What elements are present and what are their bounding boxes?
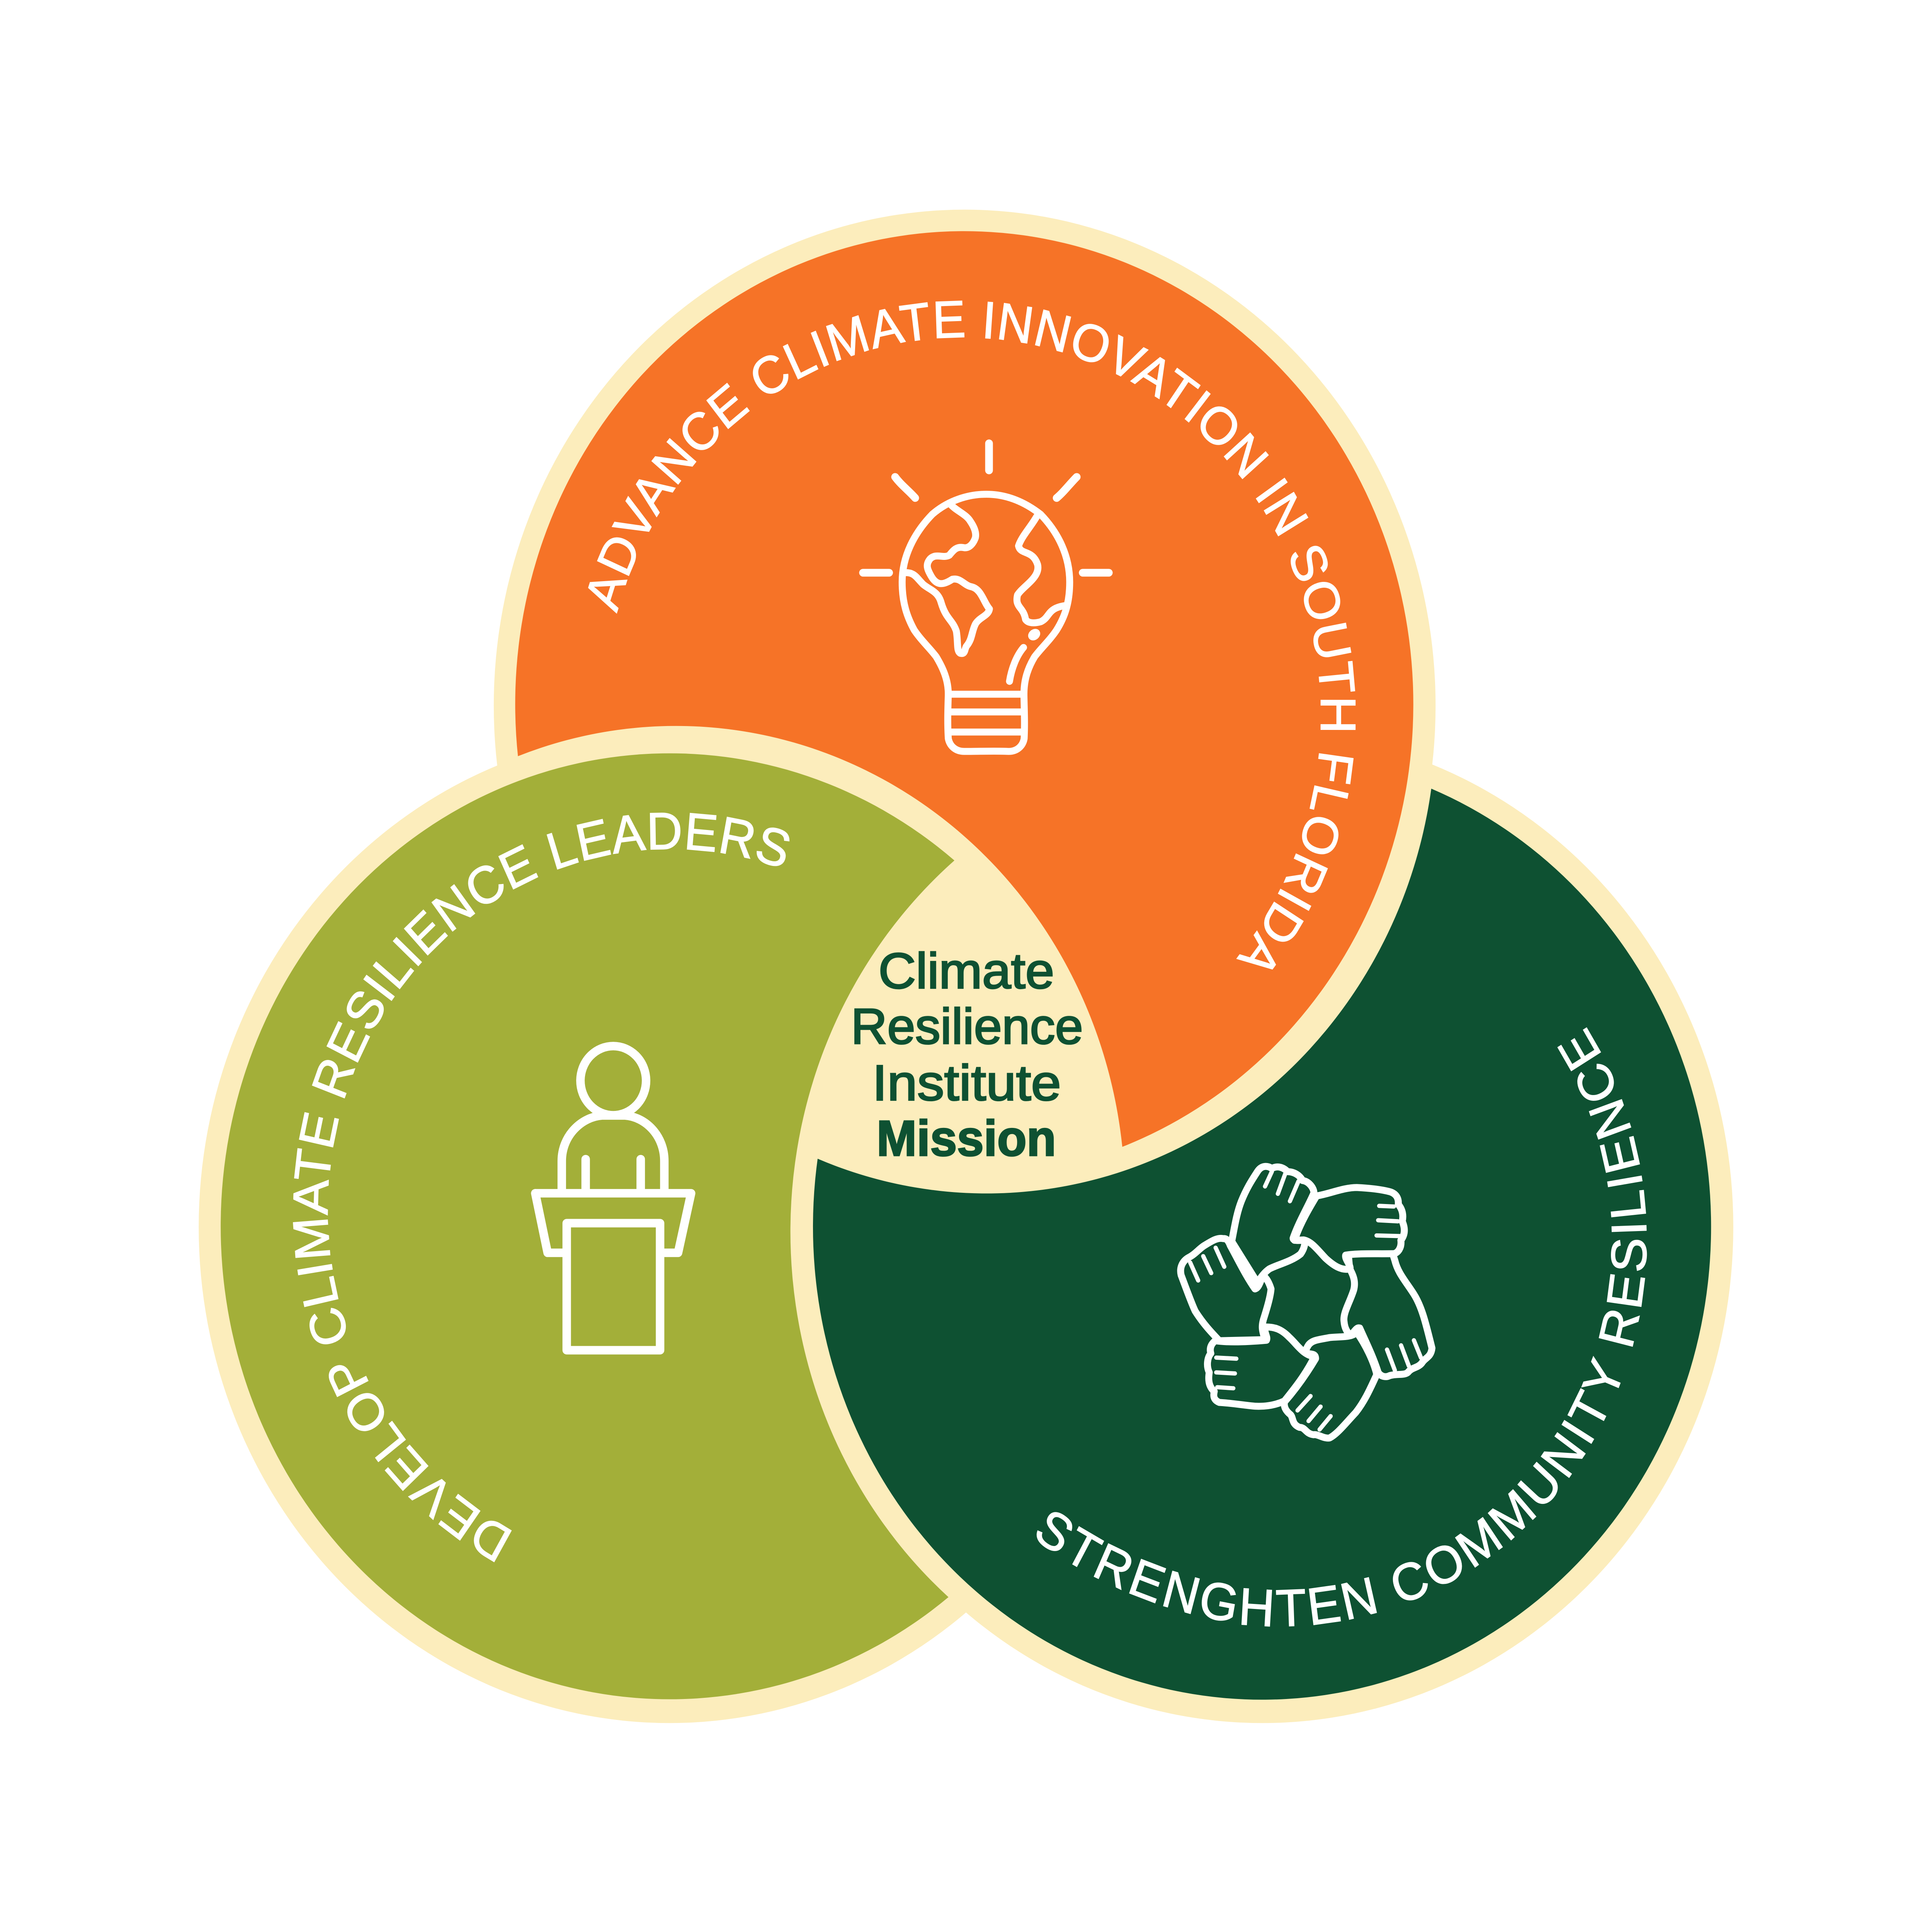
hand 1: [1232, 1167, 1314, 1282]
lectern column: [567, 1223, 660, 1350]
hand 3: [1344, 1254, 1432, 1377]
panel: dark green circle: [813, 789, 1711, 1700]
light rays: [863, 443, 1109, 573]
hand 2: [1294, 1187, 1404, 1269]
shoulders: [562, 1116, 664, 1191]
center title: Mission: [877, 1110, 1056, 1166]
hand 6: [1180, 1238, 1271, 1341]
bulb glass outline: [902, 494, 1070, 694]
arms: [586, 1159, 641, 1191]
bulb highlight: [1010, 648, 1024, 681]
curved label: advance climate innovation: ADVANCE CLIMATE INNOVATION IN SOUTH FLORIDA: [574, 289, 1366, 988]
curved label: develop climate resilience leaders: DEVELOP CLIMATE RESILIENCE LEADERS: [282, 801, 798, 1574]
head: [580, 1046, 646, 1115]
center title: Resilience: [851, 998, 1083, 1054]
hand 4: [1284, 1332, 1377, 1438]
center title: Climate: [878, 942, 1054, 999]
bulb screw base: [948, 694, 1024, 752]
bulb small highlight dot: [1031, 631, 1037, 638]
hand 5: [1208, 1327, 1315, 1406]
curved label: strengthen community resilience: STRENGHTEN COMMUNITY RESILIENCE: [1026, 1017, 1657, 1638]
center title: [851, 942, 1083, 1166]
panel: olive circle: [221, 753, 954, 1699]
center title: Institute: [872, 1054, 1061, 1111]
icon: person at lectern: [535, 1046, 691, 1350]
globe right continents: [1017, 517, 1067, 623]
lectern top: [535, 1193, 691, 1253]
globe left continents: [903, 505, 990, 653]
icon: six linked hands: [1180, 1167, 1432, 1438]
icon: light bulb with globe: [863, 443, 1109, 752]
cream backing rings: [199, 210, 1733, 1723]
panel: orange circle: [515, 231, 1413, 1147]
